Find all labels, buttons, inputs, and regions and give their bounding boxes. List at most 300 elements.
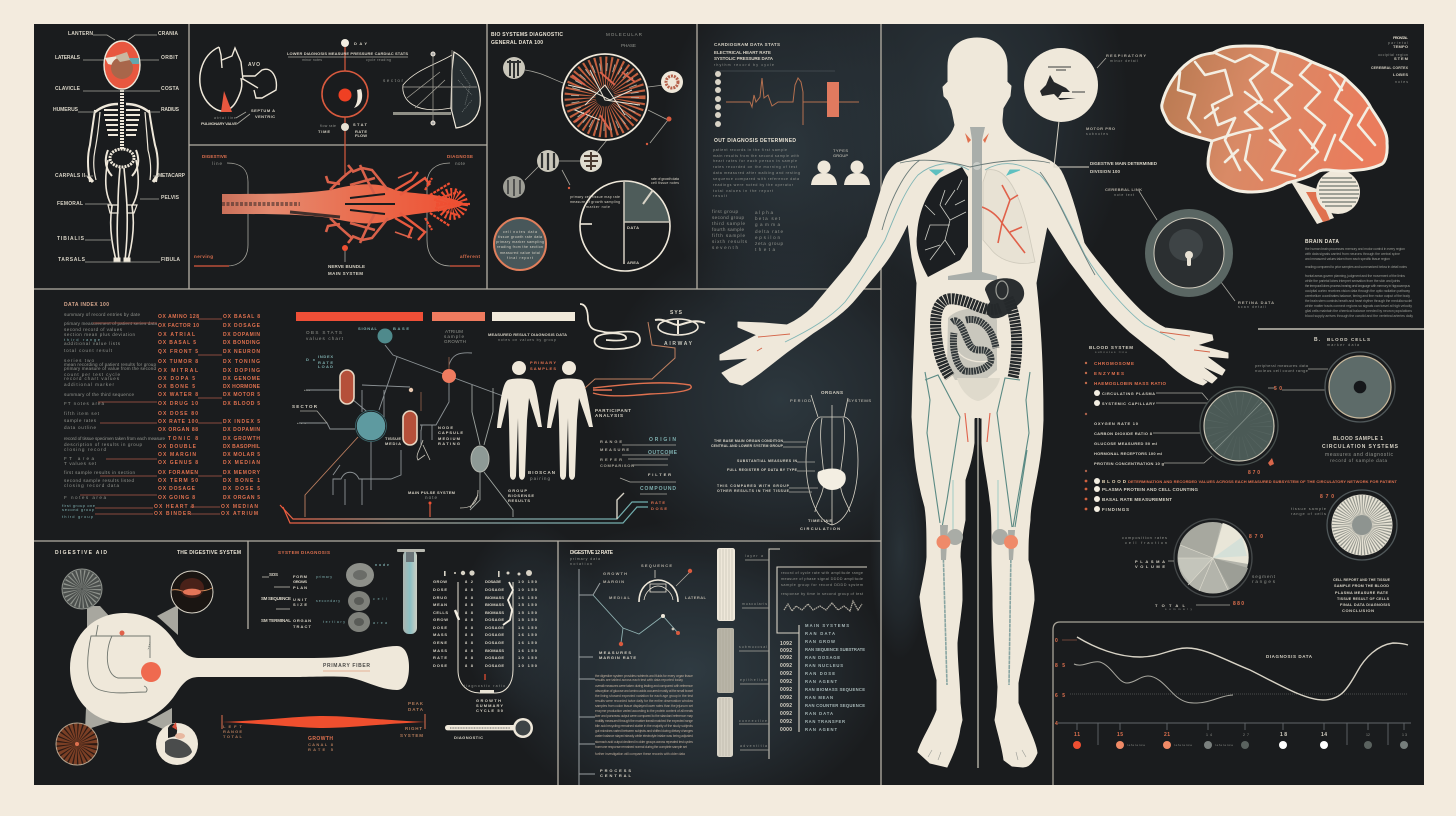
short lists: seventh bbox=[712, 245, 738, 250]
cream radial disc: tissue sample bbox=[1291, 506, 1327, 511]
quadrant circle: AREA bbox=[627, 260, 639, 265]
panel: report column bbox=[570, 548, 867, 785]
numeric rows: 0092 bbox=[780, 711, 792, 717]
numeric rows: 0092 bbox=[780, 663, 792, 669]
network labels: values chart bbox=[306, 336, 344, 341]
short lists: fourth sample bbox=[712, 227, 744, 232]
list heading and lines: total values in the report bbox=[713, 189, 773, 193]
orange columns: DX TONING bbox=[223, 359, 260, 365]
legend white rows: GLUCOSE MEASURED 50 ml bbox=[1094, 441, 1157, 446]
network labels: PRIMARY bbox=[530, 360, 556, 365]
report labels: PROCESS bbox=[600, 768, 631, 773]
skeleton labels: ORBIT bbox=[161, 55, 178, 61]
top right disc: peripheral measures data bbox=[1255, 363, 1309, 368]
organ labels: PERIOD bbox=[790, 398, 811, 403]
network labels: BIOSCAN bbox=[528, 470, 555, 475]
legend white rows: HORMONAL RECEPTORS 100 ml bbox=[1094, 451, 1162, 456]
orange columns: OX HEART 8 bbox=[154, 504, 194, 510]
left text column: section mean plus deviation bbox=[64, 332, 135, 337]
short lists: theta bbox=[755, 247, 775, 252]
right column labels top: CEREBRAL CORTEX bbox=[1371, 66, 1409, 70]
skeleton labels: HUMERUS bbox=[53, 107, 79, 113]
legend leader lines bbox=[1153, 369, 1328, 463]
brain text block: occipital cortex receives vision data through the optic radiation pathway bbox=[1305, 289, 1410, 293]
table rows bbox=[433, 579, 538, 668]
quadrant circle: rate of growth data bbox=[651, 177, 679, 181]
chart labels: DIAGNOSIS DATA bbox=[1266, 654, 1313, 659]
report text block: overall measures were taken during fasting and compared with reference bbox=[595, 684, 693, 688]
bronchial tree white bbox=[925, 180, 966, 260]
legend white rows: CIRCULATING PLASMA bbox=[1102, 392, 1155, 396]
orange columns: OX MITRAL bbox=[158, 368, 198, 374]
white organ blob bbox=[817, 468, 846, 490]
network labels: INDEX bbox=[318, 354, 333, 359]
skeleton labels: PELVIS bbox=[161, 195, 180, 201]
network labels: REFER bbox=[600, 457, 622, 462]
short lists: delta rate bbox=[755, 229, 783, 234]
table rows: 16 150 bbox=[518, 595, 538, 600]
bottom right note: PLASMA MEASURE RATE bbox=[1335, 591, 1388, 595]
target circle: RATE bbox=[355, 129, 367, 134]
bottom right note: FINAL DATA DIAGNOSIS bbox=[1340, 603, 1390, 607]
data table: diagnostic ratio bbox=[463, 684, 505, 688]
brain folds bbox=[1178, 52, 1375, 180]
pie disc: PLASMA bbox=[1135, 559, 1165, 564]
long legend rows: DETERMINATION AND RECORDED VALUES ACROSS EACH MEASURED SUBSYSTEM OF THE CIRCULATORY NETWORK FOR PATIENT bbox=[1128, 479, 1398, 484]
chart labels: 12 bbox=[1366, 733, 1370, 737]
orange note circle: primary marker sampling bbox=[496, 240, 544, 244]
left text column: mean recording of patient results for group bbox=[64, 362, 156, 367]
chart labels bbox=[1055, 638, 1407, 747]
legend white rows: CARBON DIOXIDE RATIO 8 bbox=[1094, 431, 1153, 436]
specimen rows: area bbox=[373, 621, 387, 625]
panel: cell circles: GENERAL DATA 100 bbox=[491, 40, 543, 46]
chart labels: 11 bbox=[1074, 732, 1080, 738]
network labels: LOAD bbox=[318, 364, 333, 369]
panel: lollipop organ map bbox=[55, 549, 538, 765]
target circle: cycle reading bbox=[366, 58, 391, 62]
network labels: GROWTH bbox=[444, 339, 466, 344]
pie disc: composition rates bbox=[1122, 535, 1167, 540]
legend white rows: PROTEIN CONCENTRATION 10 g bbox=[1094, 461, 1165, 466]
network labels: DOSE bbox=[651, 506, 667, 511]
chart secondary curve bbox=[1074, 662, 1233, 703]
ECG heading bbox=[714, 42, 835, 71]
organ labels bbox=[711, 390, 871, 531]
network labels: RESULTS bbox=[508, 498, 530, 503]
wedge anatomical diagram bbox=[383, 50, 480, 128]
spindle labels: GROWTH bbox=[308, 736, 333, 742]
table rows: BIOMASS bbox=[485, 648, 504, 653]
network labels: COMPOUND bbox=[640, 486, 676, 492]
patient icons: GROUP bbox=[833, 153, 848, 158]
report text block: gut microbes varied between subjects and shifted during dietary changes bbox=[595, 729, 693, 733]
panel: right legend and discs bbox=[1085, 337, 1399, 613]
ECG heading: ELECTRICAL HEART RATE bbox=[714, 50, 771, 55]
orange columns: DX BONDING bbox=[223, 340, 260, 346]
toes bbox=[928, 750, 1026, 760]
chart labels: 18 bbox=[1280, 732, 1287, 738]
orange columns: OX AMINO 128 bbox=[158, 314, 199, 320]
heart labels: VENTRIC bbox=[255, 114, 275, 119]
list heading and lines: OUT DIAGNOSIS DETERMINED bbox=[714, 138, 796, 144]
bird organ icon: SYS bbox=[670, 310, 683, 316]
dark eye disc: CEREBRAL LINK bbox=[1105, 187, 1142, 192]
orange columns: DX BONE 1 bbox=[223, 478, 260, 484]
heart labels: SEPTUM A bbox=[251, 108, 275, 113]
orange columns: DX DOSAGE bbox=[223, 323, 261, 329]
orange columns: OX GENUS 8 bbox=[158, 460, 198, 466]
panel: left table bbox=[62, 302, 261, 519]
network labels: RANGE bbox=[600, 439, 622, 444]
line chart bbox=[1055, 637, 1411, 749]
callout: top circle: DIVISION 100 bbox=[1090, 169, 1120, 174]
background glows bbox=[460, 0, 1130, 816]
framed chart box: record of cycle rate with amplitude range bbox=[781, 571, 863, 575]
dark eye disc: note text bbox=[1114, 193, 1134, 197]
report labels: GROWTH bbox=[603, 571, 627, 576]
headings: SYSTEM DIAGNOSIS bbox=[278, 550, 330, 555]
organ outline bbox=[806, 395, 858, 525]
lollipop probe: DIAGNOSTIC bbox=[454, 735, 483, 740]
red glow circle bbox=[171, 571, 213, 613]
striped bar labels: submucosal bbox=[739, 645, 767, 649]
legend orange rows: ENZYMES bbox=[1094, 371, 1124, 376]
orange columns: TONIC 8 bbox=[168, 436, 198, 442]
list heading and lines: data measured after walking and resting bbox=[713, 171, 800, 175]
left text column: record of tissue specimen taken from each measure bbox=[64, 436, 165, 441]
nerve labels: DIAGNOSE bbox=[447, 154, 473, 159]
large cell circle bbox=[562, 54, 648, 140]
left black lung bbox=[917, 167, 968, 277]
skeleton bbox=[88, 90, 158, 262]
orange node bbox=[442, 369, 456, 383]
short lists: sixth results bbox=[712, 239, 748, 244]
nerve labels: line bbox=[212, 161, 222, 166]
pie disc: TOTAL bbox=[1155, 603, 1186, 608]
left text column: FT notes area bbox=[64, 401, 104, 406]
chart labels: 85 bbox=[1055, 663, 1065, 669]
short lists: epsilon bbox=[755, 235, 780, 240]
short lists: beta set bbox=[755, 216, 781, 221]
table rows: DOSAGE bbox=[485, 617, 504, 622]
quadrant circle: primary cell tissue map rate bbox=[570, 195, 620, 199]
left text column: summary of the third sequence bbox=[64, 392, 134, 397]
report labels: LATERAL bbox=[685, 595, 707, 600]
network labels: RATING bbox=[438, 441, 460, 446]
specimen rows: SM SEQUENCE bbox=[261, 596, 291, 601]
network labels: SECTOR bbox=[292, 404, 318, 409]
right column labels top: occipital region bbox=[1378, 53, 1408, 57]
panel: ECG and patients bbox=[712, 42, 870, 252]
report labels bbox=[599, 563, 707, 778]
snake coil bbox=[580, 304, 640, 349]
orange columns: DX GENOME bbox=[223, 376, 261, 382]
brain text block: and measured values taken from each specific tissue region bbox=[1305, 257, 1390, 261]
green disc bbox=[1200, 386, 1282, 476]
table rows: 16 150 bbox=[518, 640, 538, 645]
ECG trace bbox=[726, 78, 859, 125]
orange columns: OX GOING 8 bbox=[158, 495, 195, 501]
report text block: absorption of glucose and amino acids occurred mostly at the small bowel bbox=[595, 689, 693, 693]
table rows: 88 bbox=[465, 648, 474, 653]
skeleton labels: COSTA bbox=[161, 86, 179, 92]
center title: measures and diagnostic bbox=[1325, 452, 1394, 458]
callout: top circle: DIGESTIVE MAIN DETERMINED bbox=[1090, 161, 1158, 166]
left text column: total count result bbox=[64, 348, 113, 353]
orange columns: OX ATRIAL bbox=[158, 332, 195, 338]
skeleton labels: RADIUS bbox=[161, 107, 180, 113]
orange columns: DX DOPING bbox=[223, 368, 260, 374]
root sketches bbox=[417, 440, 478, 508]
top right disc: marker data bbox=[1327, 343, 1359, 347]
two human figures bbox=[497, 361, 593, 480]
target circle: minor notes bbox=[302, 58, 322, 62]
dark eye disc bbox=[1105, 187, 1274, 309]
pie disc: 870 bbox=[1249, 534, 1263, 540]
orange columns: DX HORMONE bbox=[223, 384, 261, 390]
numeric rows: 0000 bbox=[780, 727, 792, 733]
table rows: DOSE bbox=[433, 663, 447, 668]
chart axis bbox=[1058, 723, 1411, 745]
skeleton labels: LANTERN bbox=[68, 31, 93, 37]
left text column: second sample results listed bbox=[64, 478, 134, 483]
orange columns: DX ORGAN 5 bbox=[223, 495, 260, 501]
table rows: GENE bbox=[433, 640, 447, 645]
orange columns: OX ATRIUM bbox=[221, 511, 258, 517]
orange columns: DX BLOOD 5 bbox=[223, 401, 260, 407]
ECG heading: CARDIOGRAM DATA STATS bbox=[714, 42, 780, 47]
orange columns: OX BONE 5 bbox=[158, 384, 195, 390]
numeric rows: RAN DATA bbox=[805, 711, 833, 716]
skeleton labels: CRANIA bbox=[158, 31, 178, 37]
chart labels: reference bbox=[1174, 743, 1192, 747]
skeleton labels: FIBULA bbox=[161, 257, 180, 263]
ECG heading: rhythm record by cycle bbox=[714, 63, 774, 67]
quadrant circle bbox=[570, 177, 679, 271]
network labels: RATE bbox=[651, 500, 665, 505]
abdomen background bbox=[947, 308, 997, 380]
skeleton labels: TARSALS bbox=[58, 257, 86, 263]
network labels: note bbox=[425, 495, 437, 500]
left text column: second record of values bbox=[64, 327, 123, 332]
table rows: 10 150 bbox=[518, 579, 538, 584]
table rows: DOSE bbox=[433, 625, 447, 630]
numeric rows: RAN GROW bbox=[805, 639, 835, 644]
short lists: zeta group bbox=[755, 241, 783, 246]
table rows: DOSAGE bbox=[485, 625, 504, 630]
center title: CIRCULATION SYSTEMS bbox=[1322, 444, 1399, 450]
table rows: 16 150 bbox=[518, 632, 538, 637]
top right disc bbox=[1255, 337, 1395, 422]
spoon dots: PRIMARY FIBER bbox=[323, 663, 370, 669]
bottom right note bbox=[1333, 578, 1391, 613]
network labels: GROUP bbox=[508, 488, 527, 493]
network labels: pairing bbox=[530, 476, 550, 481]
quadrant circle: marker note bbox=[586, 205, 610, 209]
gray fan circle bbox=[62, 569, 102, 609]
striped bar labels: layer a bbox=[745, 554, 763, 558]
top right disc: nucleus cell count range bbox=[1255, 368, 1309, 373]
target circle: STAT bbox=[353, 122, 368, 127]
table rows: 15 150 bbox=[518, 610, 538, 615]
stomach bbox=[985, 278, 1024, 318]
bladder region bbox=[957, 378, 1000, 401]
orange columns: OX WATER 8 bbox=[158, 392, 198, 398]
gray connectors bbox=[85, 605, 178, 733]
bottom right note: TISSUE RESULT OF CELLS bbox=[1337, 597, 1390, 601]
teal nodes bbox=[356, 328, 392, 442]
list heading and lines: patient records in the first sample bbox=[713, 148, 787, 152]
body silhouette bbox=[720, 38, 1228, 767]
orange note circle: reading from the section bbox=[497, 245, 543, 249]
right column labels top: STEM bbox=[1394, 56, 1409, 61]
panel: nerve bundle bbox=[194, 154, 480, 276]
table rows: RATE bbox=[433, 655, 447, 660]
striped bar labels: epithelium bbox=[740, 678, 767, 682]
table rows: 16 150 bbox=[518, 648, 538, 653]
top right disc: BLOOD CELLS bbox=[1327, 337, 1370, 342]
table rows: DRUG bbox=[433, 595, 447, 600]
small red markers bbox=[568, 116, 672, 189]
table rows: DOSAGE bbox=[485, 655, 504, 660]
target circle: LOWER DIAGNOSIS MEASURE PRESSURE CARDIAC STATS bbox=[287, 51, 408, 56]
cerebrum bbox=[1162, 46, 1387, 192]
spoon shape bbox=[70, 613, 409, 723]
specimen rows: node bbox=[375, 563, 389, 567]
headings: DIGESTIVE AID bbox=[55, 550, 107, 556]
pie disc bbox=[1122, 519, 1276, 611]
numeric rows: RAN COUNTER SEQUENCE bbox=[805, 703, 865, 708]
orange columns: OX BINDER bbox=[154, 511, 191, 517]
headings: THE DIGESTIVE SYSTEM bbox=[177, 550, 241, 556]
report text block: hormone response remained normal during the complete sample set bbox=[595, 745, 687, 749]
legend white rows bbox=[1085, 390, 1165, 472]
numeric rows: RAN DATA bbox=[805, 631, 835, 636]
orange columns: OX BASAL 5 bbox=[158, 340, 196, 346]
orange columns: OX MEDIAN bbox=[221, 504, 258, 510]
orange columns: DX MEDIAN bbox=[223, 460, 260, 466]
left text column: record chart values bbox=[64, 376, 120, 381]
nerve labels: note bbox=[455, 161, 465, 166]
table rows: DOSAGE bbox=[485, 632, 504, 637]
spindle labels: RATE 5 bbox=[308, 747, 334, 752]
target circle bbox=[287, 39, 408, 176]
numeric rows: 0092 bbox=[780, 719, 792, 725]
network labels: notes on values by group bbox=[498, 338, 556, 342]
specimen rows: SIZE bbox=[293, 602, 307, 607]
headings bbox=[55, 550, 330, 556]
report text block: samples from colon tissue displayed lower rates than the jejunum set bbox=[595, 704, 693, 708]
specimen rows: GROWS bbox=[293, 579, 307, 584]
specimen rows: tertiary bbox=[323, 620, 345, 624]
network labels: MAIN PULSE SYSTEM bbox=[408, 490, 456, 495]
connector lines bbox=[525, 70, 668, 185]
left text column: primary measure of value from the second bbox=[64, 366, 156, 371]
specimen rows: primary bbox=[316, 575, 332, 579]
report text block: motility measured through the marker transit matched the expected range bbox=[595, 719, 693, 723]
panel: cell circles: PHASE bbox=[621, 43, 636, 48]
right column labels top: LOBES bbox=[1393, 72, 1408, 77]
test tube bbox=[397, 549, 425, 634]
green disc: 50 bbox=[1274, 386, 1282, 392]
spindle labels bbox=[223, 701, 424, 752]
orange columns: DX DOPAMIN bbox=[223, 332, 260, 338]
network labels: NODE bbox=[438, 425, 453, 430]
quadrant circle: measure of growth sampling bbox=[570, 200, 620, 204]
orange columns: OX FORAMEN bbox=[158, 470, 198, 476]
spindle labels: LEFT bbox=[223, 724, 243, 729]
panel: cell circles bbox=[491, 32, 683, 271]
head scan bbox=[104, 41, 140, 89]
bottom right note: CONCLUSION bbox=[1342, 608, 1374, 613]
heart labels: atrial line bbox=[214, 116, 236, 120]
skeleton labels: TIBIALIS bbox=[57, 236, 85, 242]
left text column: first sample results in section bbox=[64, 470, 135, 475]
chart labels: 0 bbox=[1055, 638, 1058, 644]
orange columns: OX DOPA 5 bbox=[158, 376, 195, 382]
specimen rows: PLAN bbox=[293, 585, 307, 590]
dark eye disc: RETINA DATA bbox=[1238, 300, 1274, 305]
specimen rows: ORGAN bbox=[293, 618, 311, 623]
color bars bbox=[296, 312, 575, 321]
panel: skeleton figure bbox=[53, 31, 186, 263]
wedge anatomical diagram: sector bbox=[383, 78, 403, 83]
panel: left table: DATA INDEX 100 bbox=[64, 302, 109, 308]
legend white rows: OXYGEN RATE 10 bbox=[1094, 421, 1139, 426]
spoon inner circuits bbox=[88, 625, 150, 693]
short lists: alpha bbox=[755, 210, 773, 215]
table rows: MASS bbox=[433, 632, 447, 637]
list heading and lines: heart rates for each person in sample bbox=[713, 159, 797, 163]
numeric rows: 0092 bbox=[780, 655, 792, 661]
short lists: gamma bbox=[755, 222, 780, 227]
chart labels: 21 bbox=[1164, 732, 1170, 738]
left text column: FT area bbox=[64, 456, 94, 461]
table rows: 88 bbox=[465, 632, 474, 637]
report text block bbox=[595, 674, 693, 756]
teal path bbox=[593, 595, 680, 646]
orange note circle: tissue growth rate data bbox=[498, 235, 542, 239]
striped bar labels: muscularis bbox=[742, 602, 767, 606]
network labels: SAMPLES bbox=[530, 366, 556, 371]
chart primary curve bbox=[1077, 637, 1408, 700]
specimen rows: SOS bbox=[269, 572, 278, 577]
orange columns: OX FACTOR 10 bbox=[158, 323, 199, 329]
pie disc: ranges bbox=[1252, 579, 1276, 584]
report text block: water balance stayed steady while electrolyte intake was being adjusted bbox=[595, 734, 693, 738]
report text block: results are tabled across each test with data reported today bbox=[595, 678, 683, 682]
short lists: third sample bbox=[712, 221, 745, 226]
table rows: DOSAGE bbox=[485, 579, 501, 584]
orange note circle: final report bbox=[507, 256, 533, 260]
table rows: BIOMASS bbox=[485, 602, 504, 607]
right column labels top: parietal bbox=[1388, 41, 1408, 45]
orange columns: DX DOPAMIN bbox=[223, 427, 260, 433]
network labels: MEDIUM bbox=[438, 436, 461, 441]
left text column: count per test cycle bbox=[64, 372, 120, 377]
chart labels: 27 bbox=[1243, 733, 1249, 737]
table rows: 88 bbox=[465, 640, 474, 645]
network labels: MEASURED RESULT DIAGNOSIS DATA bbox=[488, 332, 567, 337]
heart labels: AVO bbox=[248, 62, 260, 68]
report heading bbox=[570, 550, 614, 566]
left text column: third range bbox=[64, 337, 101, 342]
organ labels: OTHER RESULTS IN THE TISSUE bbox=[717, 489, 790, 493]
spindle labels: TOTAL bbox=[223, 734, 243, 739]
chart labels: 4 bbox=[1055, 721, 1058, 727]
chart labels: 14 bbox=[1321, 732, 1327, 738]
